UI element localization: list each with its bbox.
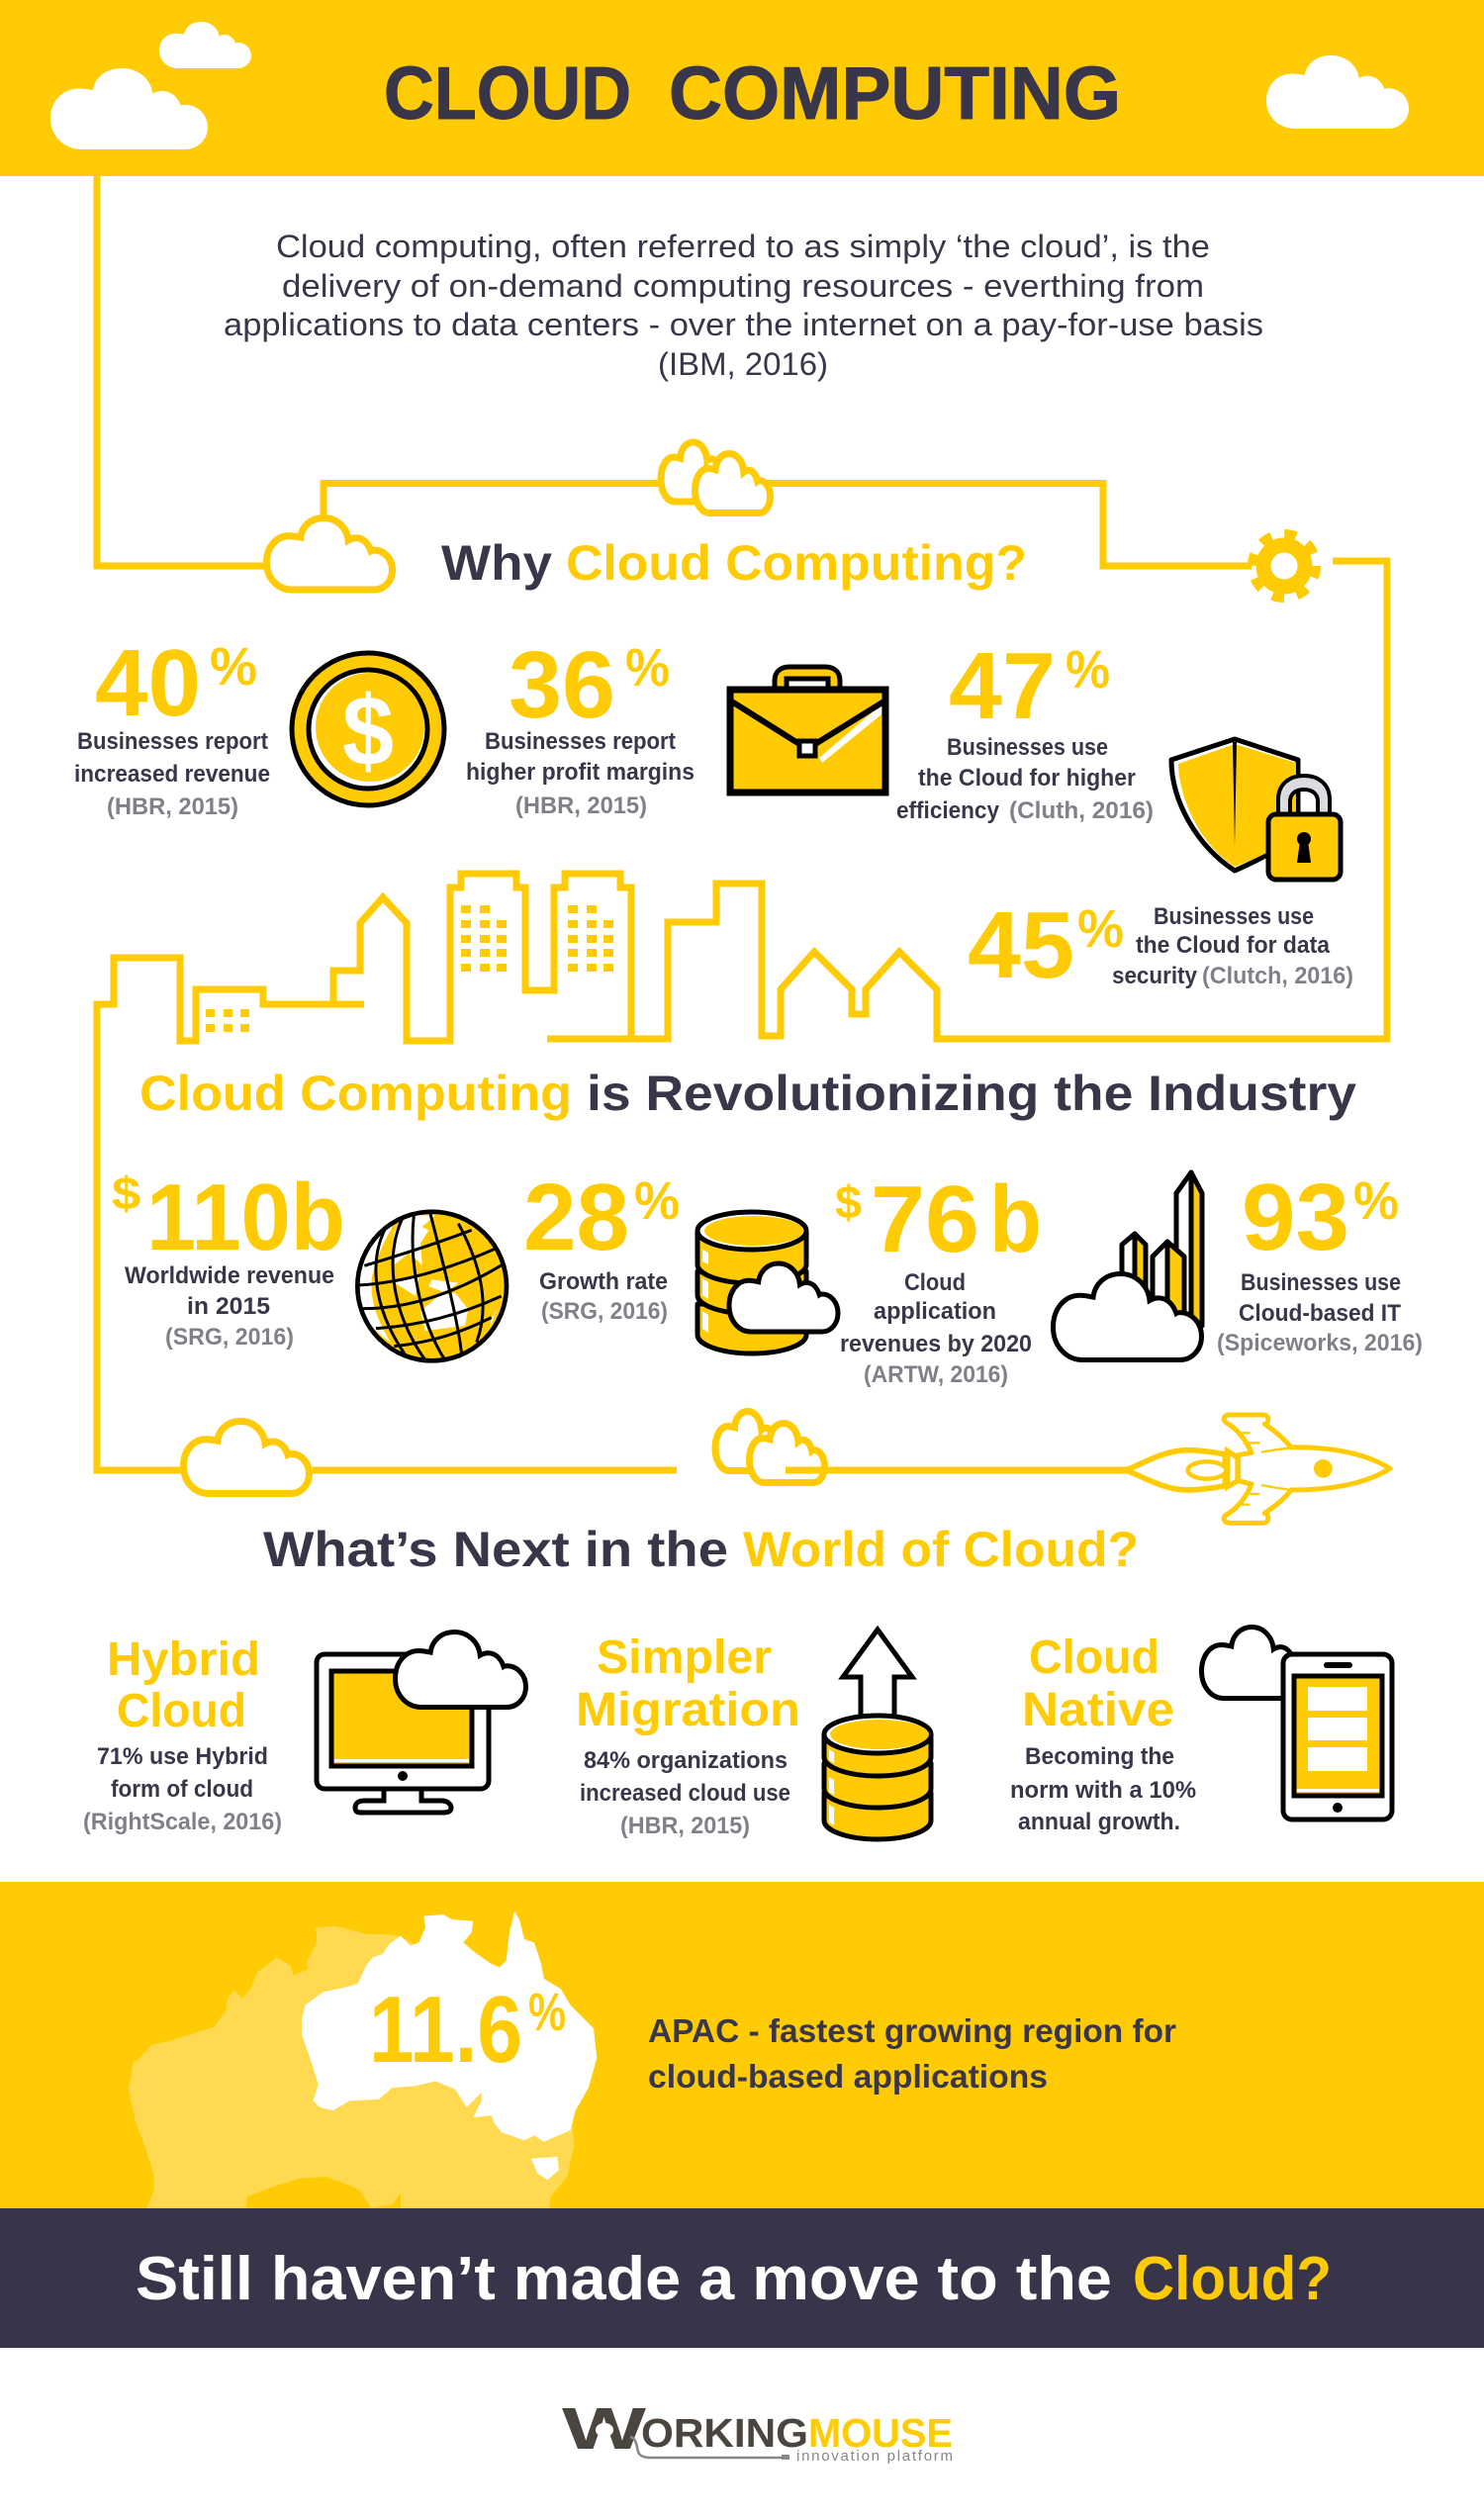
APAC text: cloud-based applications (648, 2058, 1048, 2095)
block: hybrid cloud: Hybrid (107, 1633, 260, 1686)
stat: 47%: % (1066, 640, 1110, 699)
stat: $76b: b (989, 1166, 1042, 1272)
stat: 11.6%: % (528, 1983, 566, 2042)
stat: 45%: the Cloud for data (1136, 932, 1331, 959)
icon: shield and lock (1171, 739, 1341, 880)
block: simpler migration: (HBR, 2015) (620, 1813, 750, 1839)
stat: 93%: Cloud-based IT (1239, 1300, 1401, 1327)
icon: dollar coin: $ (342, 676, 394, 787)
logo: WorkingMouse: ORKING (641, 2410, 808, 2456)
stat: 40% (74, 630, 270, 820)
stat: 47%: (Cluth, 2016) (1009, 797, 1154, 824)
stat: $76b: application (874, 1298, 996, 1325)
block: cloud native (1010, 1632, 1196, 1835)
panel: APAC band (0, 1882, 1484, 2208)
stat: 47%: 47 (949, 633, 1056, 739)
city windows (206, 905, 613, 1032)
stat: 40%: increased revenue (74, 761, 270, 788)
stat: $110b: $ (112, 1167, 140, 1219)
block: cloud native: Native (1022, 1684, 1174, 1736)
intro text (224, 229, 1263, 382)
block: hybrid cloud: Cloud (117, 1685, 246, 1737)
logo: WorkingMouse: W (562, 2396, 646, 2462)
block: cloud native: norm with a 10% (1010, 1777, 1196, 1804)
stat: 28%: % (634, 1171, 680, 1231)
icon: double cloud bottom middle (715, 1411, 831, 1482)
block: simpler migration: Migration (576, 1684, 800, 1736)
stat: 47% (896, 633, 1154, 824)
stat: $76b: (ARTW, 2016) (864, 1361, 1008, 1388)
icon: globe (357, 1212, 507, 1360)
block: hybrid cloud: 71% use Hybrid (97, 1743, 268, 1770)
panel: call to action (0, 2208, 1484, 2348)
icon: gear (1252, 534, 1316, 598)
stat: 36%: higher profit margins (466, 759, 695, 786)
icon: arrow and database (824, 1630, 931, 1839)
panel: call to action: Cloud? (1133, 2245, 1332, 2313)
stat: 45% (968, 892, 1353, 998)
stat: 40%: % (210, 637, 257, 697)
intro text: applications to data centers - over the internet on a pay-for-use basis (224, 307, 1263, 342)
stat: 28%: Growth rate (539, 1268, 668, 1295)
block: cloud native: Cloud (1029, 1632, 1159, 1684)
stat: $110b: in 2015 (187, 1293, 270, 1320)
stat: 45%: 45 (968, 892, 1074, 998)
stat: 36%: 36 (509, 632, 615, 738)
header cloud small (159, 22, 251, 68)
stat: $76b: $ (835, 1176, 862, 1228)
logo: WorkingMouse (562, 2396, 953, 2465)
icon: tablet with cloud (1201, 1627, 1392, 1819)
stat: 28%: 28 (523, 1165, 629, 1270)
map: Australia (129, 1912, 597, 2208)
heading: why cloud computing: Cloud Computing? (566, 535, 1027, 591)
stat: 28%: (SRG, 2016) (541, 1298, 668, 1325)
stat: 93% (1217, 1165, 1423, 1356)
logo: WorkingMouse: innovation platform (796, 2448, 953, 2465)
stat: 47%: Businesses use (947, 734, 1108, 761)
stat: 40%: Businesses report (77, 728, 268, 755)
icon: double cloud why top (661, 442, 770, 513)
APAC text: APAC - fastest growing region for (648, 2012, 1176, 2049)
header cloud right (1266, 55, 1409, 129)
intro text: (IBM, 2016) (658, 346, 828, 382)
header cloud left (50, 68, 208, 149)
heading: what's next: What’s Next in the (263, 1522, 728, 1577)
icon: dollar coin (292, 653, 444, 805)
stat: 40%: 40 (95, 630, 201, 736)
logo: WorkingMouse: MOUSE (808, 2410, 953, 2456)
stat: 93%: (Spiceworks, 2016) (1217, 1330, 1423, 1356)
stat: $76b (835, 1166, 1042, 1388)
icon: outline cloud why left (267, 518, 392, 590)
stat: 93%: 93 (1242, 1165, 1349, 1270)
heading: why cloud computing: Why (441, 535, 552, 591)
stat: 36%: Businesses report (485, 728, 676, 755)
stat: $110b: 110b (146, 1165, 345, 1270)
stat: 45%: security (1112, 963, 1198, 989)
panel: call to action: Still haven’t made a move to the (136, 2245, 1112, 2313)
stat: 36% (466, 632, 695, 819)
stat: $76b: 76 (871, 1166, 979, 1272)
stat: 45%: Businesses use (1154, 903, 1314, 930)
heading: revolutionizing: is Revolutionizing the Industry (587, 1066, 1356, 1121)
stat: $110b: Worldwide revenue (125, 1262, 334, 1289)
stat: $110b: (SRG, 2016) (165, 1324, 294, 1351)
block: cloud native: annual growth. (1018, 1809, 1180, 1835)
stat: 36%: % (625, 638, 670, 698)
stat: $76b: revenues by 2020 (840, 1331, 1032, 1357)
icon: outline cloud bottom left (184, 1421, 309, 1494)
stat: 28% (523, 1165, 680, 1325)
intro text: Cloud computing, often referred to as simply ‘the cloud’, is the (276, 229, 1210, 264)
heading: what's next (263, 1522, 1139, 1577)
block: hybrid cloud (83, 1633, 282, 1835)
stat: 47%: the Cloud for higher (918, 765, 1136, 792)
stat: 45%: % (1077, 899, 1124, 959)
block: simpler migration: Simpler (597, 1632, 772, 1684)
block: hybrid cloud: form of cloud (111, 1776, 253, 1803)
header band (0, 0, 1484, 176)
stat: $110b (112, 1165, 345, 1351)
heading: revolutionizing: Cloud Computing (139, 1066, 572, 1121)
title: CLOUD (384, 51, 631, 135)
icon: monitor with cloud (317, 1632, 526, 1813)
stat: 93%: Businesses use (1241, 1269, 1401, 1296)
icon: database with cloud (697, 1212, 838, 1353)
heading: revolutionizing (139, 1066, 1356, 1121)
heading: what's next: World of Cloud? (743, 1522, 1139, 1577)
stat: 40%: (HBR, 2015) (107, 793, 238, 820)
stat: 47%: efficiency (896, 797, 1000, 824)
title (384, 51, 1121, 135)
icon: rocket (1126, 1415, 1390, 1523)
icon: city towers with cloud (1053, 1172, 1202, 1359)
block: cloud native: Becoming the (1025, 1743, 1174, 1770)
block: simpler migration (576, 1632, 800, 1839)
block: simpler migration: increased cloud use (580, 1780, 790, 1807)
connector line: header to why section (97, 176, 1387, 1470)
block: hybrid cloud: (RightScale, 2016) (83, 1809, 282, 1835)
icon: briefcase (730, 667, 885, 793)
APAC text (648, 2012, 1176, 2095)
stat: 45%: (Clutch, 2016) (1202, 963, 1353, 989)
stat: $76b: Cloud (904, 1269, 966, 1296)
block: simpler migration: 84% organizations (584, 1747, 788, 1774)
intro text: delivery of on-demand computing resources - everthing from (282, 268, 1204, 304)
stat: 93%: % (1353, 1171, 1399, 1231)
stat: 11.6%: 11.6 (369, 1977, 522, 2083)
title: COMPUTING (669, 51, 1121, 135)
stat: 36%: (HBR, 2015) (515, 793, 647, 819)
